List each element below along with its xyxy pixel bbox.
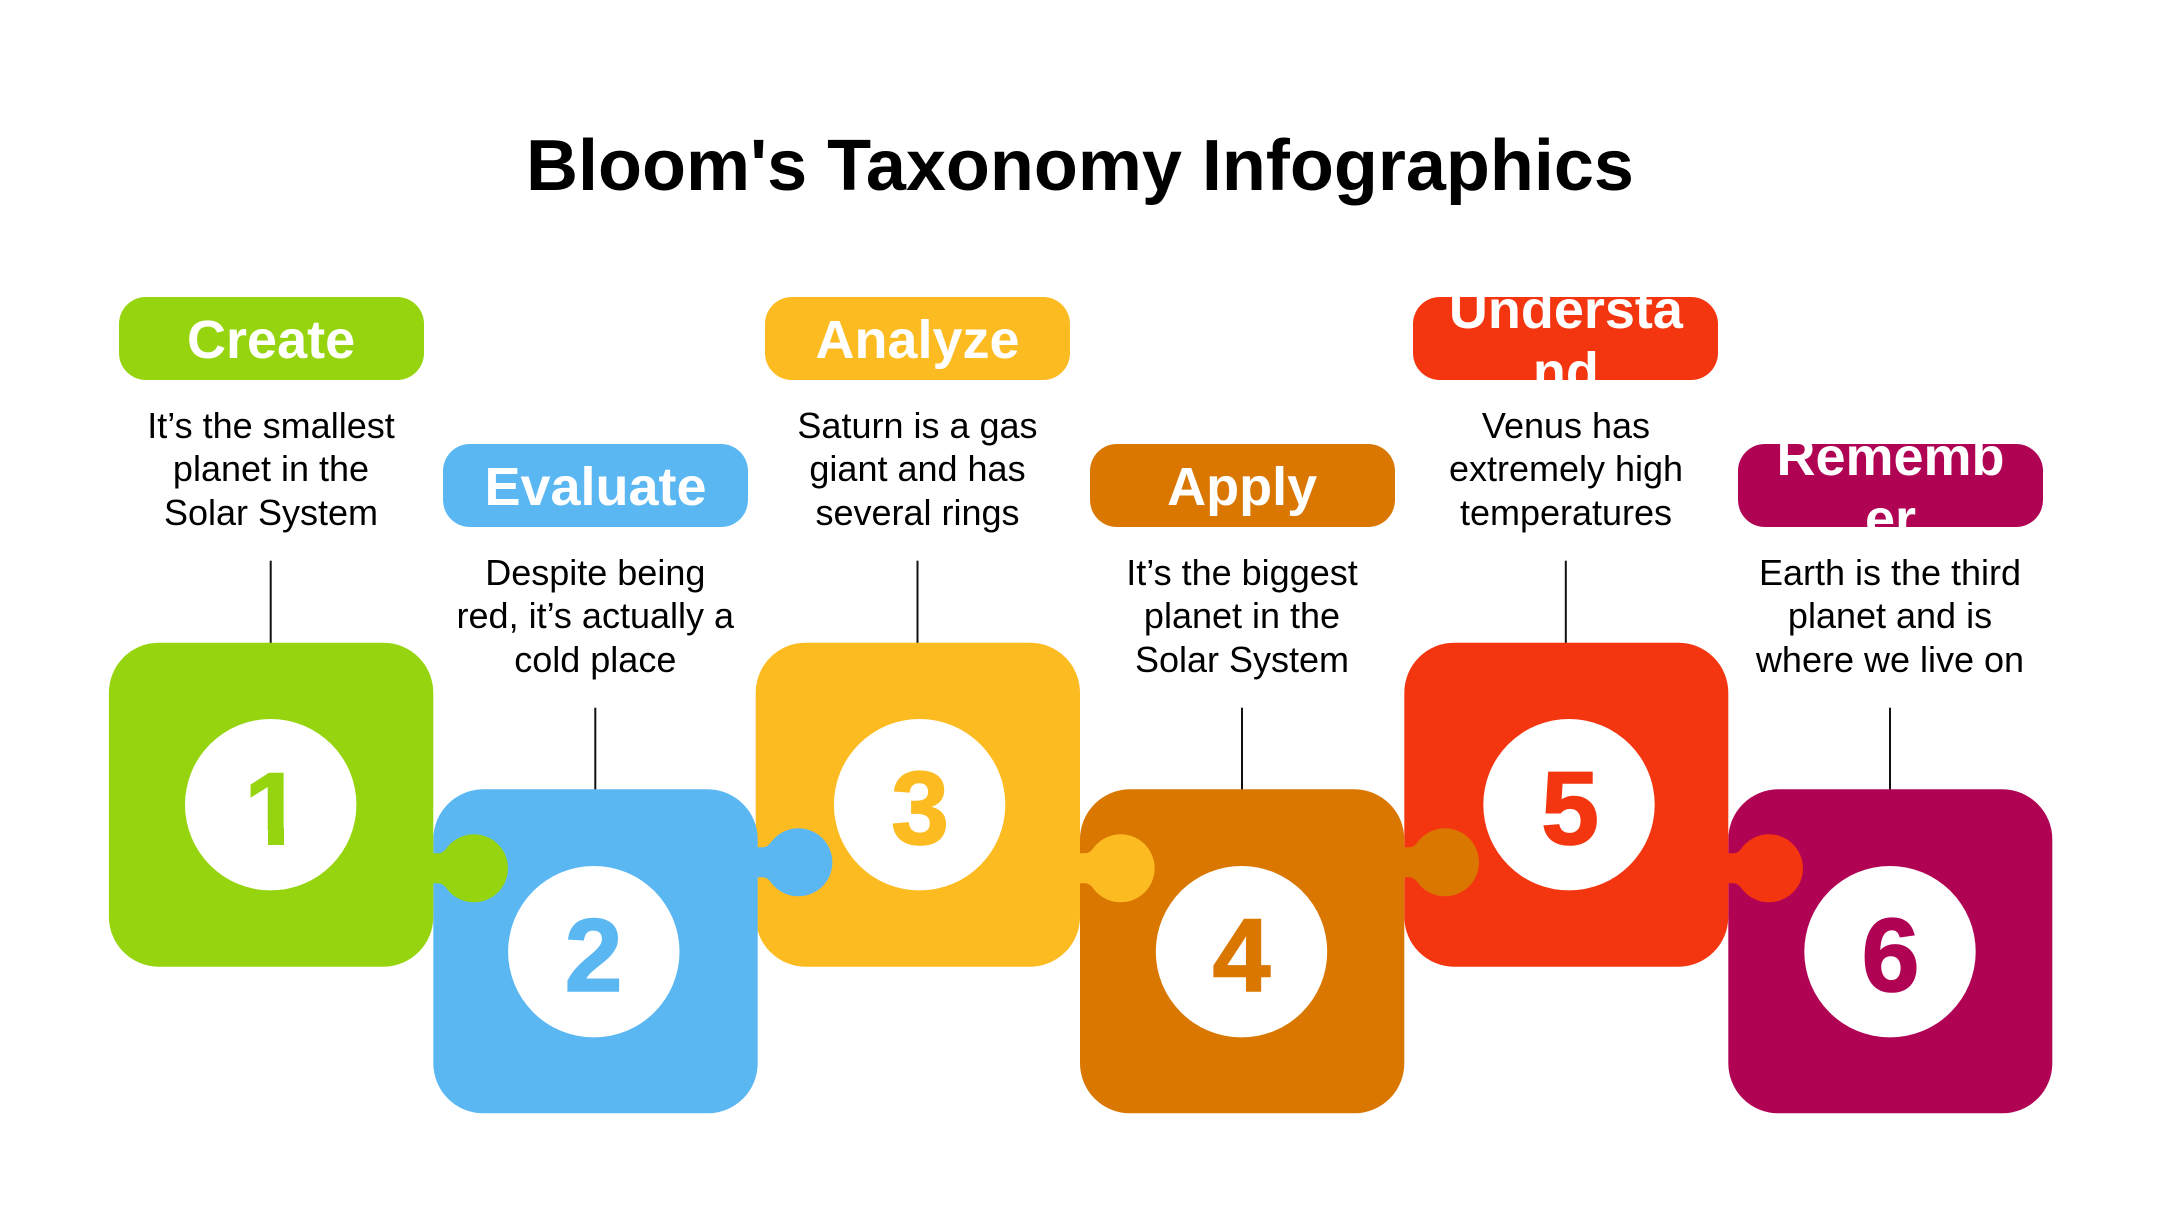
connector line 6 — [1889, 708, 1891, 791]
number circle 2 — [508, 866, 680, 1037]
puzzle piece 1 — [109, 643, 433, 967]
description: Analyze: Saturn is a gas — [797, 405, 1038, 446]
description: Apply: planet in the — [1144, 595, 1340, 636]
puzzle piece 2 — [431, 789, 758, 1113]
label: Create: Create — [187, 310, 355, 370]
puzzle diagram — [108, 560, 2052, 1114]
number 5: 5 — [1541, 751, 1599, 867]
number 1 — [250, 772, 284, 845]
description: Create: planet in the — [173, 448, 369, 489]
number circle 1 — [185, 719, 356, 890]
tab from piece 2 — [756, 828, 832, 896]
description: Remember — [1756, 552, 2024, 680]
puzzle piece 4 — [1078, 789, 1404, 1113]
number circle 6 — [1804, 866, 1976, 1037]
description: Analyze — [797, 405, 1038, 533]
description: Create: Solar System — [164, 492, 378, 533]
label: Evaluate — [443, 444, 748, 527]
description: Understand: Venus has — [1482, 405, 1650, 446]
connector line 5 — [1565, 561, 1567, 644]
label: Analyze: Analyze — [815, 310, 1020, 370]
description: Understand: extremely high — [1449, 448, 1683, 489]
connector line 3 — [916, 561, 918, 644]
description: Evaluate: cold place — [514, 639, 676, 680]
label: Create — [119, 297, 424, 380]
description: Evaluate — [457, 552, 734, 680]
number 1: 1 — [244, 752, 302, 868]
label: Apply: Apply — [1167, 457, 1317, 517]
tab from piece 4 — [1402, 828, 1479, 896]
description: Evaluate: Despite being — [485, 552, 705, 593]
label: Apply — [1090, 444, 1395, 527]
description: Remember: where we live on — [1756, 639, 2024, 680]
description: Analyze: several rings — [815, 492, 1020, 533]
tab from piece 3 — [1078, 834, 1155, 902]
description: Apply: It’s the biggest — [1126, 552, 1358, 593]
label: Evaluate: Evaluate — [484, 457, 707, 517]
description: Remember: planet and is — [1788, 595, 1992, 636]
puzzle piece 5 — [1402, 643, 1728, 967]
connector line 4 — [1241, 708, 1243, 791]
number 4: 4 — [1213, 898, 1271, 1014]
title: Bloom's Taxonomy Infographics — [526, 126, 1634, 206]
description: Create — [147, 405, 395, 533]
description: Analyze: giant and has — [809, 448, 1026, 489]
tab from piece 5 — [1726, 834, 1803, 902]
puzzle piece 6 — [1726, 789, 2052, 1113]
description: Apply: Solar System — [1135, 639, 1349, 680]
description: Understand: temperatures — [1460, 492, 1672, 533]
description: Apply — [1126, 552, 1358, 680]
connector line 2 — [594, 708, 596, 791]
description: Create: It’s the smallest — [147, 405, 395, 446]
number 3: 3 — [891, 751, 949, 867]
tab from piece 1 — [431, 834, 508, 902]
description: Understand — [1449, 405, 1683, 533]
description: Remember: Earth is the third — [1759, 552, 2021, 593]
connector line 1 — [270, 561, 272, 644]
puzzle piece 3 — [756, 643, 1080, 967]
number circle 4 — [1156, 866, 1327, 1037]
number circle 3 — [834, 719, 1005, 890]
number 6: 6 — [1862, 898, 1919, 1014]
number 2: 2 — [565, 898, 622, 1014]
description: Evaluate: red, it’s actually a — [457, 595, 734, 636]
label: Analyze — [765, 297, 1070, 380]
number circle 5 — [1483, 719, 1655, 890]
